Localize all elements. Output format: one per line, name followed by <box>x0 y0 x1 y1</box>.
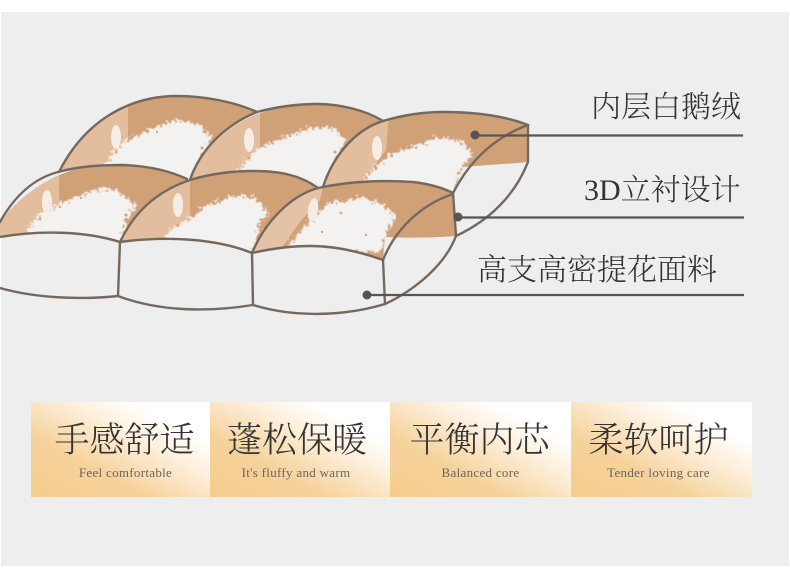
feature card: fluffy and warm: It's fluffy and warm <box>242 465 350 480</box>
pillow: back middle down fill <box>192 105 380 186</box>
feature card: comfortable: Feel comfortable <box>79 465 172 480</box>
illustration: layered quilt cross-section <box>0 94 744 316</box>
feature card: tender loving care: 柔软呵护 <box>588 421 728 460</box>
quilt outlines <box>0 96 528 314</box>
feature card: fluffy and warm <box>210 402 390 497</box>
pillow: back left down fill <box>62 97 254 170</box>
callout: jacquard fabric <box>362 290 744 300</box>
feature card: tender loving care <box>571 402 752 497</box>
feature card: comfortable: 手感舒适 <box>54 421 194 460</box>
pillow: back right down fill <box>324 113 527 190</box>
label: 3D lining: 3D立衬设计 <box>584 174 741 207</box>
callout: 3D lining <box>454 212 744 222</box>
feature card: comfortable <box>31 402 210 497</box>
label: inner goose down: 内层白鹅绒 <box>591 91 741 124</box>
feature card: tender loving care: Tender loving care <box>607 465 710 480</box>
pillow: front left down fill <box>0 166 189 236</box>
pillow: front right down fill with tan side face <box>254 182 455 258</box>
label: jacquard fabric: 高支高密提花面料 <box>477 254 717 287</box>
callout: inner goose down <box>470 130 743 140</box>
feature card: fluffy and warm: 蓬松保暖 <box>227 421 367 460</box>
pillow: front middle down fill <box>122 172 316 250</box>
feature card: balanced core: 平衡内芯 <box>409 421 550 460</box>
feature card: balanced core: Balanced core <box>442 465 519 480</box>
feature card: balanced core <box>390 402 571 497</box>
